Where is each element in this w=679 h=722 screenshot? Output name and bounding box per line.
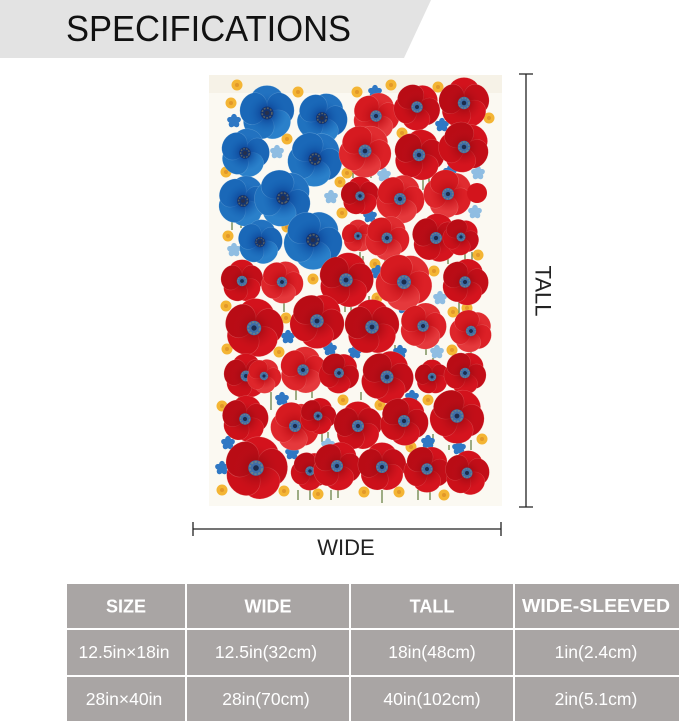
table row: 28in by 40in bbox=[86, 689, 637, 709]
small yellow flowers bbox=[216, 80, 494, 500]
flower stems bbox=[232, 125, 475, 503]
header banner bbox=[0, 0, 431, 58]
red flowers bbox=[212, 72, 503, 513]
wide label: WIDE bbox=[317, 535, 375, 560]
garden flag artwork bbox=[206, 72, 503, 513]
blue flowers bbox=[206, 81, 360, 287]
tall label: TALL bbox=[530, 266, 556, 316]
table row: 28in by 40in: 28in(70cm) bbox=[222, 689, 310, 709]
table row: 12.5in by 18in bbox=[78, 642, 637, 662]
wide dimension arrow bbox=[193, 522, 501, 536]
table row: 12.5in by 18in: 1in(2.4cm) bbox=[555, 642, 637, 662]
table row: 12.5in by 18in: 18in(48cm) bbox=[388, 642, 476, 662]
table row: 28in by 40in: 2in(5.1cm) bbox=[555, 689, 637, 709]
table header row: WIDE-SLEEVED bbox=[522, 596, 670, 616]
table header row: WIDE bbox=[244, 596, 292, 616]
small blue flowers bbox=[214, 85, 486, 476]
table row: 28in by 40in: 28in×40in bbox=[86, 689, 162, 709]
table row: 28in by 40in: 40in(102cm) bbox=[383, 689, 481, 709]
table row: 12.5in by 18in: 12.5in×18in bbox=[78, 642, 170, 662]
table header row: SIZE bbox=[106, 596, 146, 616]
table header row: TALL bbox=[410, 596, 454, 616]
table header row bbox=[106, 596, 670, 616]
tall dimension arrow bbox=[519, 74, 533, 507]
table row: 12.5in by 18in: 12.5in(32cm) bbox=[215, 642, 317, 662]
title: SPECIFICATIONS bbox=[66, 8, 351, 49]
size table bbox=[67, 584, 679, 721]
